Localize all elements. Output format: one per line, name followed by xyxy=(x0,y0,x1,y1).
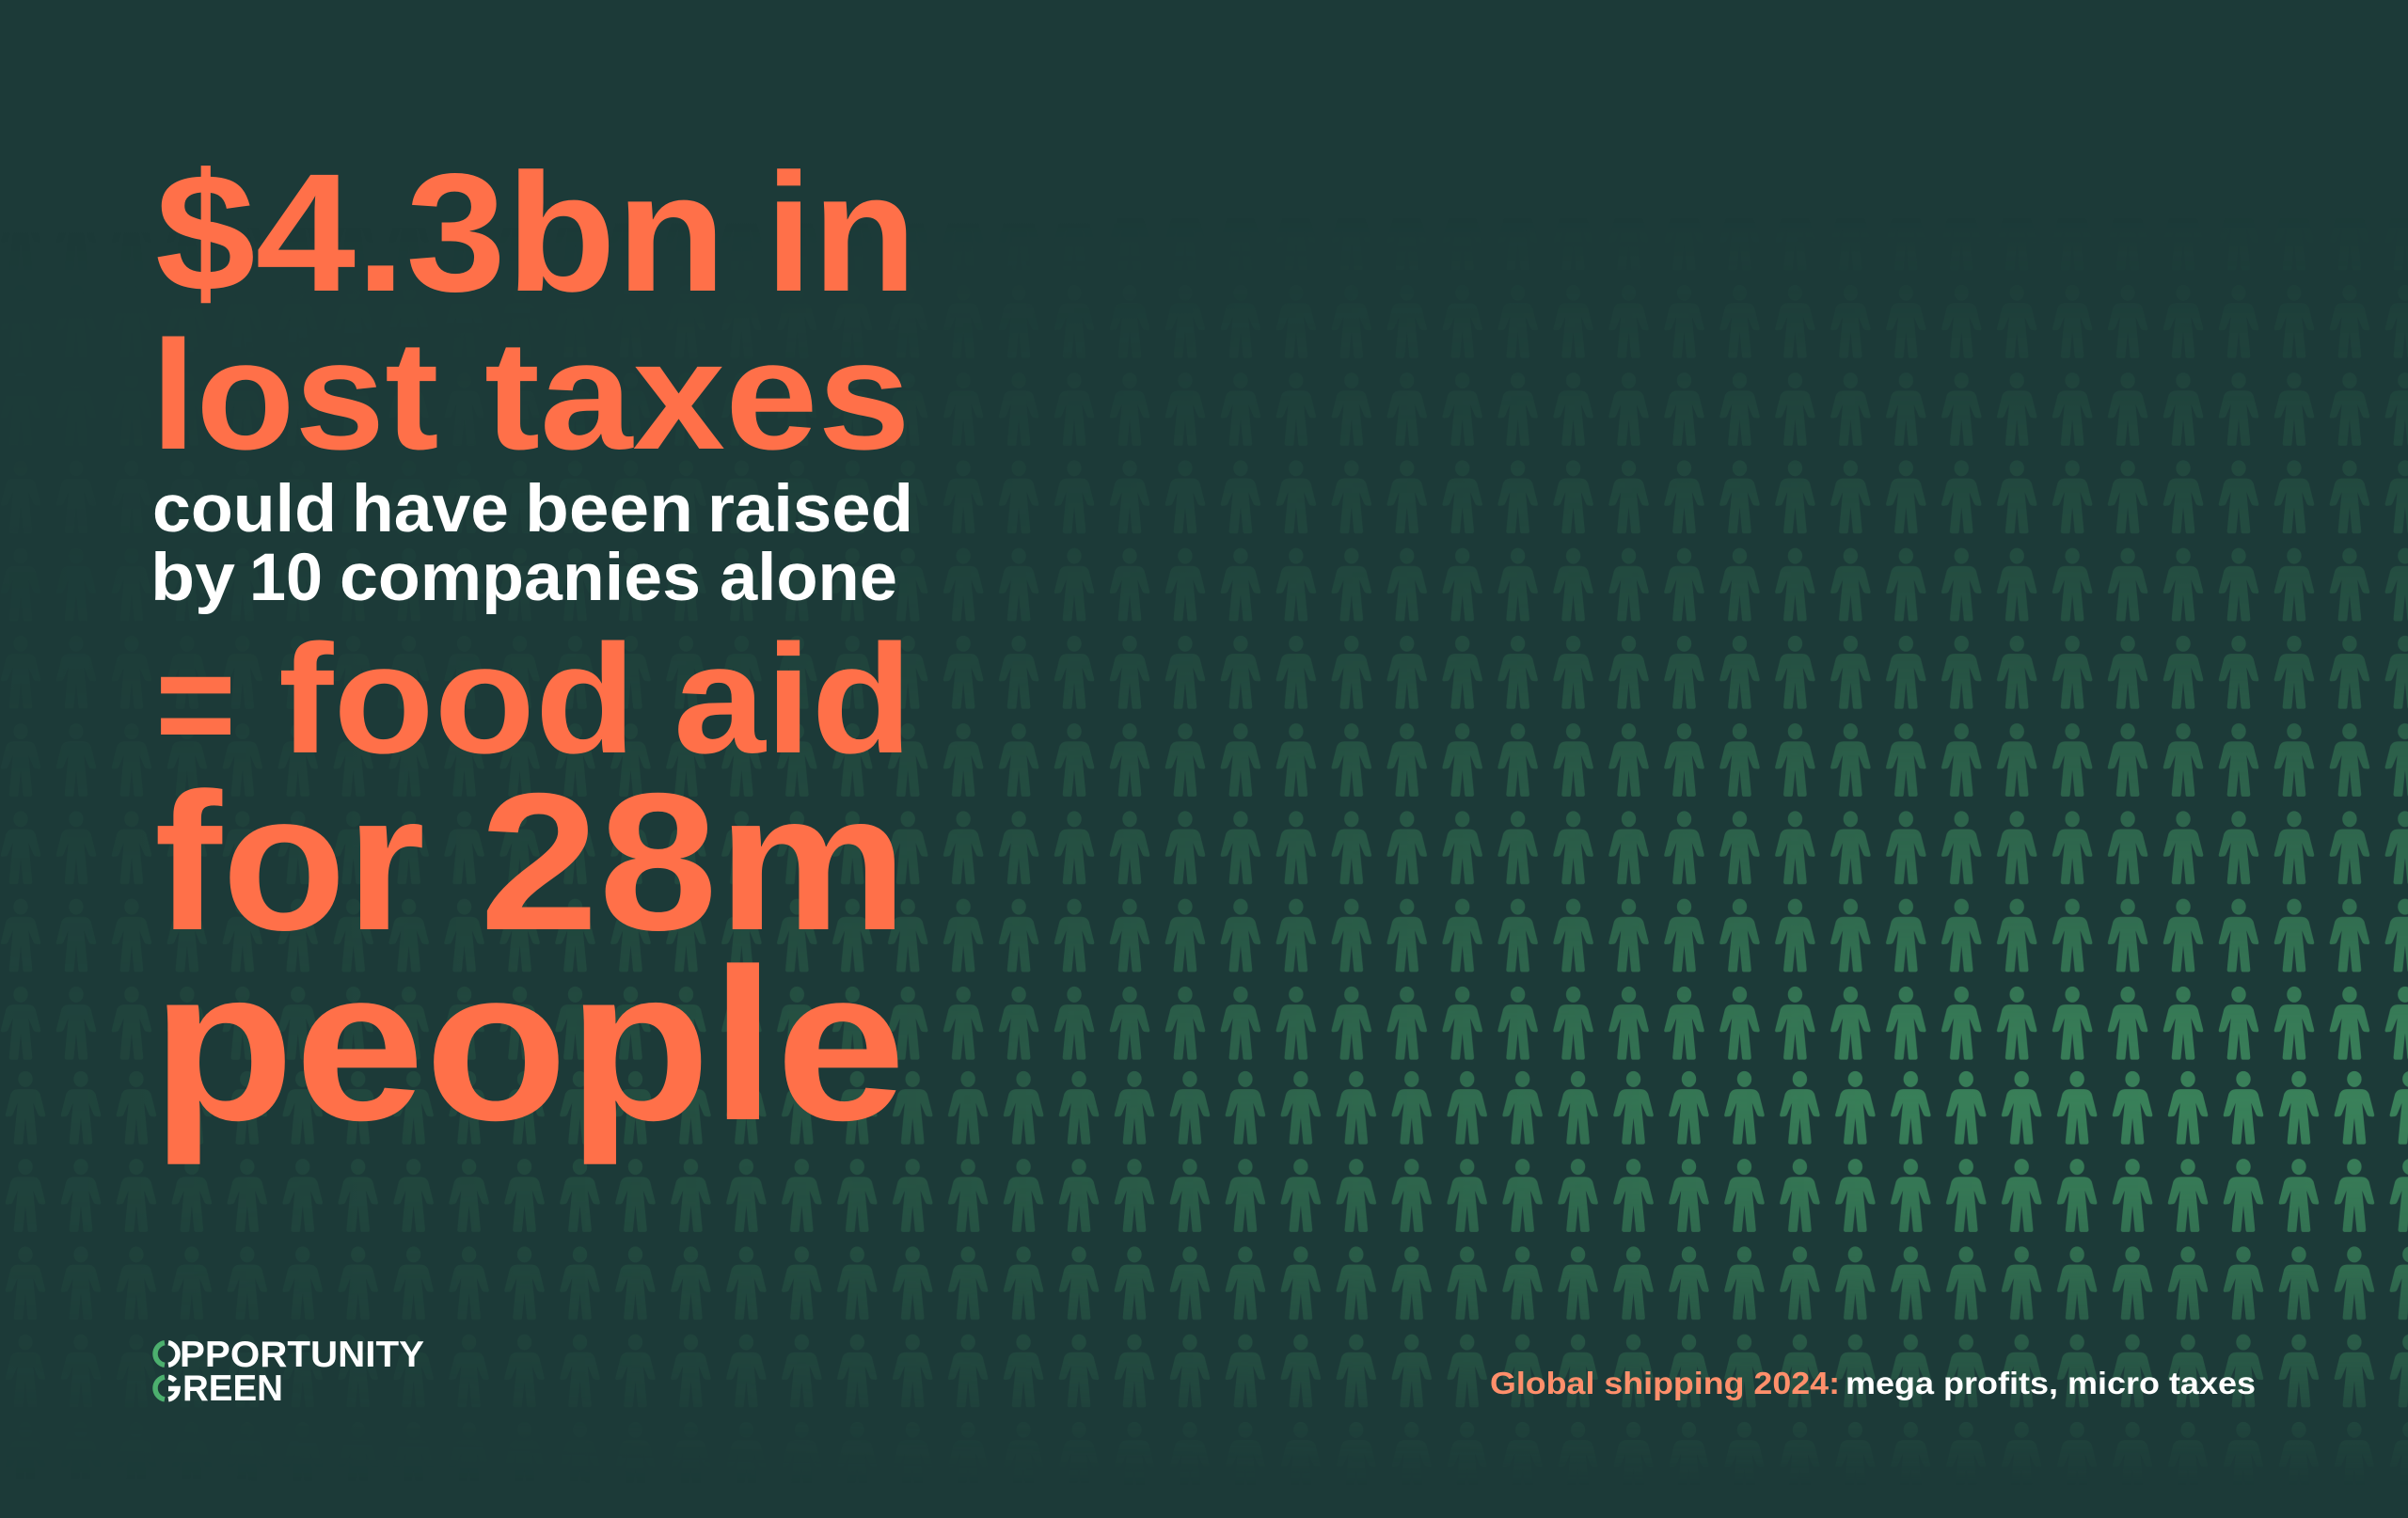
subhead line 2: by xyxy=(150,541,236,615)
logo: Opportunity Green xyxy=(155,1335,424,1409)
people rows: upper block xyxy=(1,372,2408,1060)
subhead line 2: alone xyxy=(720,541,897,615)
headline line: lost taxes xyxy=(150,308,911,482)
logo G mark xyxy=(155,1377,178,1399)
headline line: lost taxes: taxes xyxy=(484,308,911,482)
headline line: = food aid xyxy=(155,612,912,789)
caption: white part: mega profits, micro taxes xyxy=(1846,1366,2256,1400)
subhead line 1: could xyxy=(152,472,337,546)
subhead line 2: 10 xyxy=(249,541,323,615)
subhead line 1: have xyxy=(352,472,509,546)
logo O mark xyxy=(155,1343,178,1365)
subhead line 1 xyxy=(152,472,913,546)
subhead line 2: companies xyxy=(340,541,701,615)
subhead line 1: raised xyxy=(707,472,913,546)
headline line: for 28m: for xyxy=(154,753,425,972)
caption: highlighted part: Global shipping 2024: xyxy=(1490,1366,1840,1400)
headline line: $4.3bn in: in xyxy=(766,138,916,326)
headline line: = food aid: aid xyxy=(673,612,912,785)
logo wordmark line 1: PPORTUNITY xyxy=(180,1335,424,1375)
headline line: for 28m: 28m xyxy=(480,753,908,972)
people rows: lower block xyxy=(6,1070,2408,1433)
subhead line 2 xyxy=(150,541,897,615)
headline line: $4.3bn in: $4.3bn xyxy=(155,138,726,326)
headline line: for 28m xyxy=(154,753,908,972)
headline line: lost taxes: lost xyxy=(150,308,438,482)
caption xyxy=(1490,1366,2256,1400)
logo wordmark line 2: REEN xyxy=(182,1368,283,1409)
headline line: people: people xyxy=(151,924,906,1165)
headline xyxy=(150,138,916,1165)
headline line: = food aid: = xyxy=(155,619,236,789)
subhead line 1: been xyxy=(525,472,693,546)
pictogram grid of people xyxy=(1,372,2408,1433)
headline line: = food aid: food xyxy=(278,612,636,785)
